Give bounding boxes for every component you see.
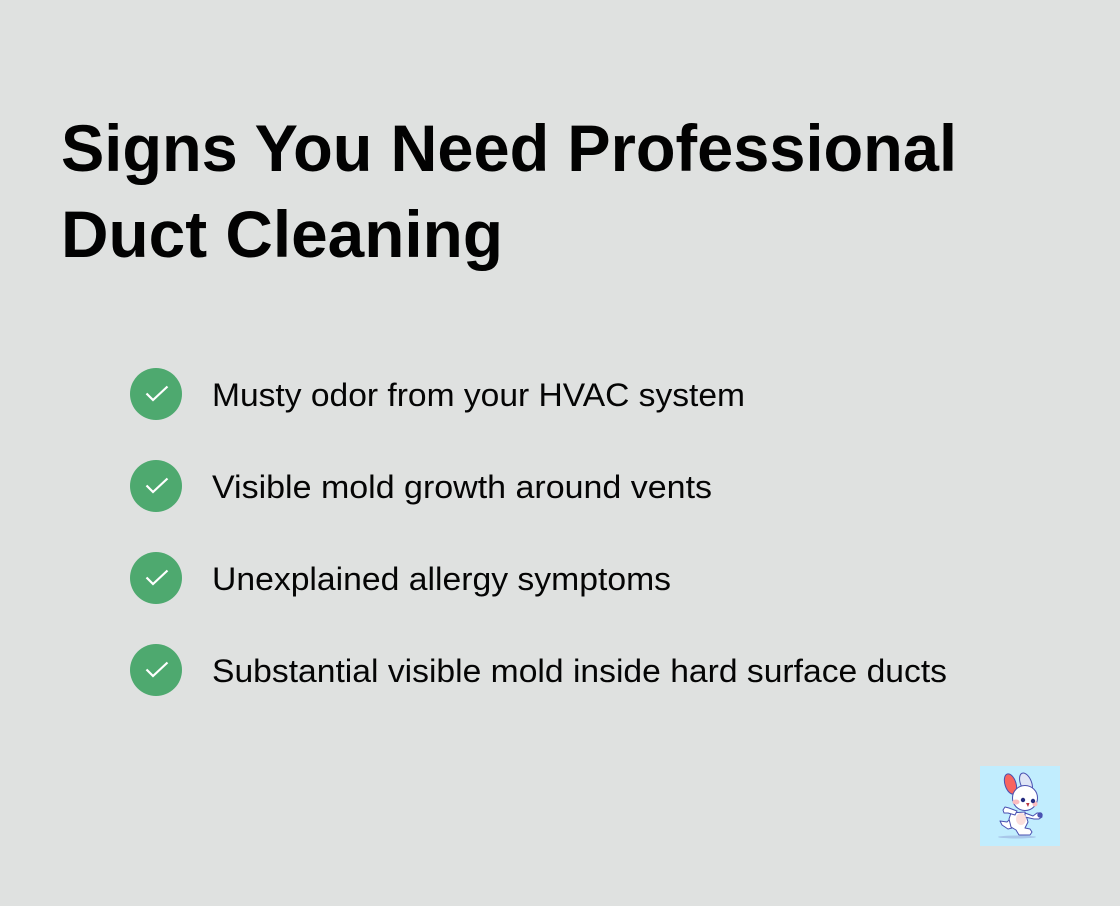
checklist xyxy=(130,368,947,696)
title: Duct Cleaning xyxy=(61,197,503,271)
item: substantial mold xyxy=(130,644,947,696)
item: visible mold xyxy=(130,460,712,512)
item: visible mold: Visible mold growth around vents xyxy=(212,469,712,505)
title: Signs You Need Professional xyxy=(61,111,957,185)
item: allergy symptoms xyxy=(130,552,671,604)
item: musty odor: Musty odor from your HVAC system xyxy=(212,377,745,413)
item: musty odor xyxy=(130,368,745,420)
title xyxy=(61,111,957,271)
item: substantial mold: Substantial visible mold inside hard surface ducts xyxy=(212,653,947,689)
item: allergy symptoms: Unexplained allergy symptoms xyxy=(212,561,671,597)
icon: running rabbit logo xyxy=(980,766,1060,846)
